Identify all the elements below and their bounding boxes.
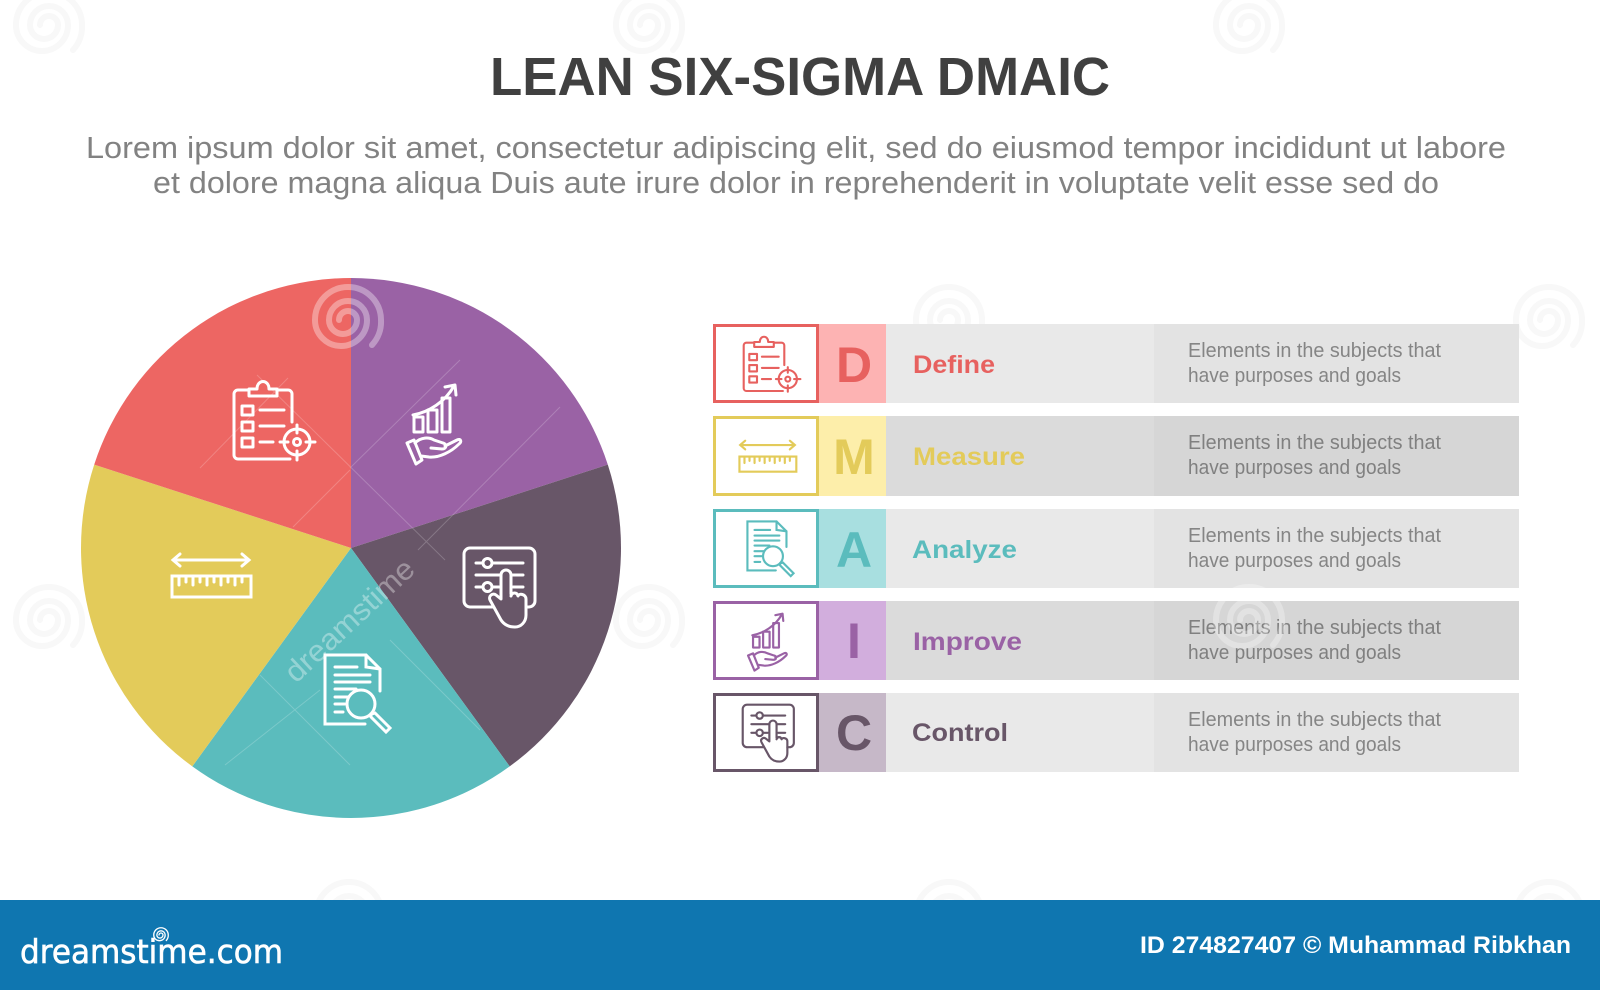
letter block (819, 601, 886, 680)
label: Improve (913, 628, 1022, 656)
watermark wordmark on pie: dreamstime (278, 552, 421, 689)
row bar (886, 693, 1519, 772)
pie chart (81, 278, 621, 818)
watermark spiral over rows (1216, 587, 1282, 646)
letter A: A (836, 522, 872, 578)
intro text: et dolore magna aliqua Duis aute irure dolor in reprehenderit in voluptate velit esse sed do (153, 165, 1439, 200)
row: define (714, 324, 1519, 403)
letter D: D (836, 337, 872, 393)
row: analyze (714, 509, 1519, 588)
description (1188, 340, 1441, 387)
description (1188, 525, 1441, 572)
icon: document magnifier (747, 521, 794, 576)
description: Elements in the subjects that (1188, 709, 1441, 731)
letter block (819, 693, 886, 772)
icon: ruler (739, 441, 796, 472)
icon box (714, 694, 818, 770)
description: Elements in the subjects that (1188, 432, 1441, 454)
letter block (819, 416, 886, 496)
icon box (714, 326, 818, 402)
letter M: M (833, 429, 875, 485)
description: have purposes and goals (1188, 734, 1401, 756)
icon box (714, 418, 818, 494)
title: LEAN SIX-SIGMA DMAIC (490, 47, 1110, 107)
row: control (714, 693, 1519, 772)
description: Elements in the subjects that (1188, 525, 1441, 547)
icon: clipboard target (744, 337, 800, 392)
logo wordmark: dreamstime.com (20, 932, 283, 971)
label: Analyze (912, 536, 1017, 564)
icon: growth chart on hand (407, 385, 461, 464)
row: measure (714, 416, 1519, 496)
icon: ruler (172, 554, 251, 597)
row bar (886, 509, 1519, 588)
slice: control (351, 465, 621, 766)
letter block (819, 509, 886, 588)
slice: measure (81, 465, 351, 766)
slice: improve (351, 278, 608, 548)
image credit: ID 274827407 © Muhammad Ribkhan (1140, 932, 1571, 959)
row: improve (714, 601, 1519, 680)
label: Measure (913, 443, 1025, 471)
watermark lines on pie (200, 360, 560, 765)
description: Elements in the subjects that (1188, 340, 1441, 362)
row bar (886, 416, 1519, 496)
intro text (86, 130, 1506, 200)
icon: clipboard target (234, 382, 315, 460)
icon: growth chart on hand (748, 614, 787, 671)
icon: document magnifier (325, 655, 390, 732)
logo spiral (154, 928, 168, 941)
icon: sliders with finger (464, 548, 535, 627)
letter I: I (847, 613, 861, 669)
slice: define (94, 278, 351, 548)
description: Elements in the subjects that (1188, 617, 1441, 639)
description (1188, 432, 1441, 479)
description: have purposes and goals (1188, 642, 1401, 664)
letter C: C (836, 705, 872, 761)
description (1188, 709, 1441, 756)
description (1188, 617, 1441, 664)
label: Define (913, 351, 995, 379)
footer band (0, 900, 1600, 990)
description: have purposes and goals (1188, 550, 1401, 572)
description: have purposes and goals (1188, 457, 1401, 479)
label: Control (912, 719, 1008, 747)
icon box (714, 602, 818, 678)
row bar (886, 324, 1519, 403)
icon box (714, 510, 818, 586)
row bar (886, 601, 1519, 680)
description: have purposes and goals (1188, 365, 1401, 387)
slice: analyze (192, 548, 510, 818)
letter block (819, 324, 886, 403)
icon: sliders with finger (743, 705, 794, 762)
watermark spiral on pie (315, 287, 381, 346)
intro text: Lorem ipsum dolor sit amet, consectetur adipiscing elit, sed do eiusmod tempor incididunt ut labore (86, 130, 1506, 165)
